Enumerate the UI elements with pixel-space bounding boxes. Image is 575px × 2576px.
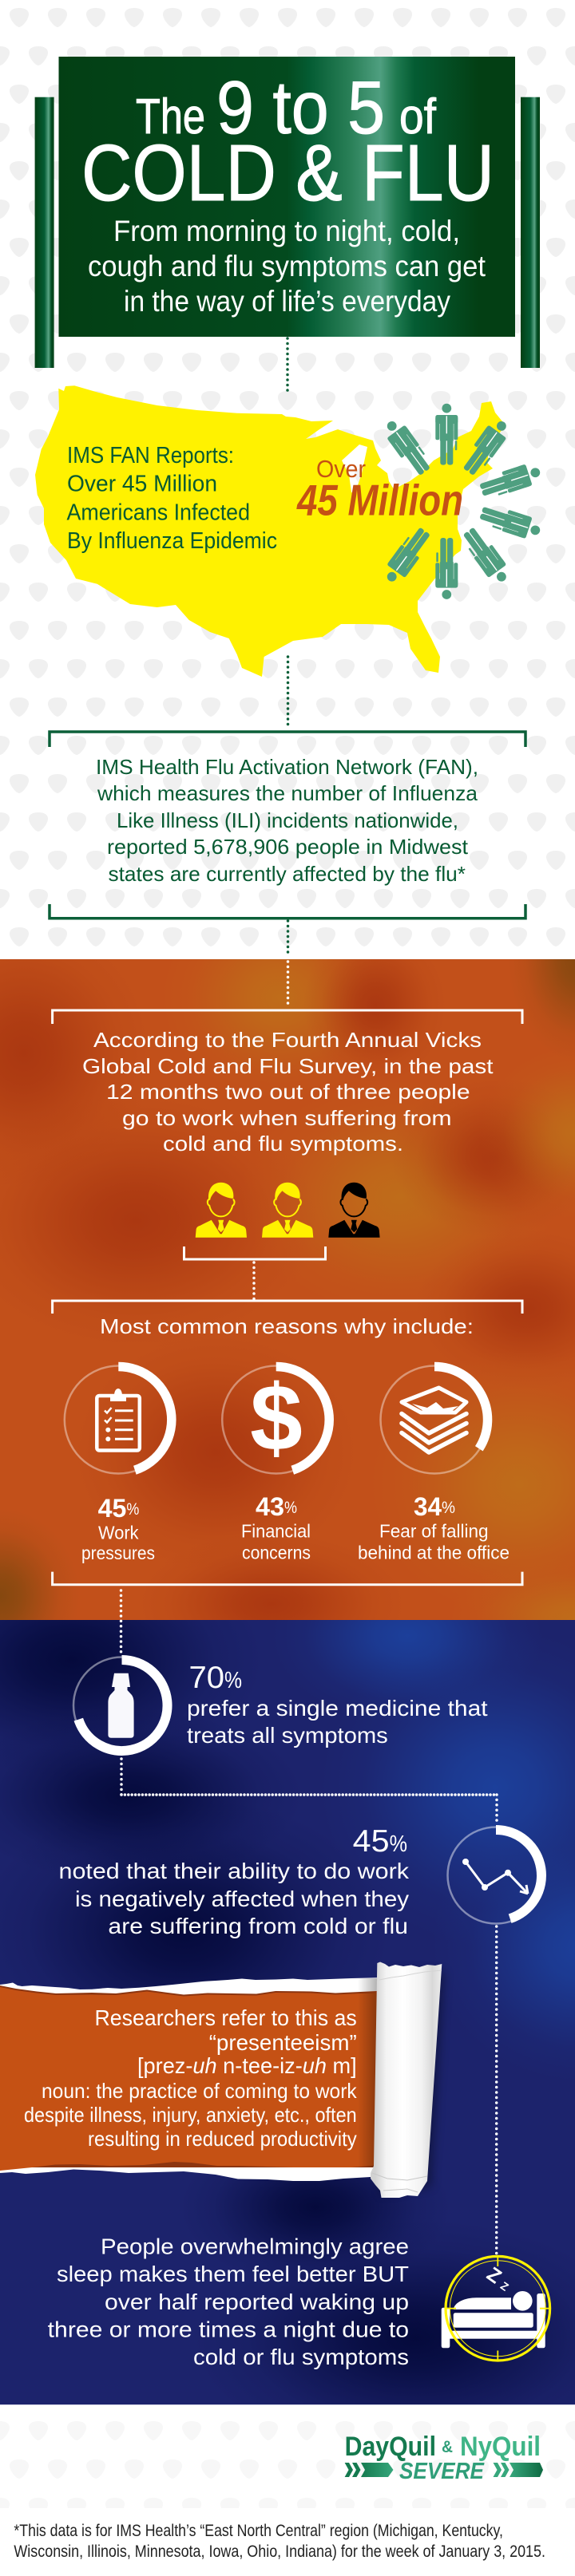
donut 43% bbox=[222, 1366, 330, 1473]
panel: footer bbox=[0, 2421, 575, 2561]
stat 45% bbox=[98, 1494, 139, 1523]
title: COLD & FLU bbox=[81, 128, 494, 218]
stat 34%: % bbox=[442, 1499, 455, 1517]
label: behind at the office bbox=[358, 1542, 510, 1563]
left banner post bbox=[35, 97, 54, 368]
dotted connector: banner to map bbox=[286, 338, 289, 394]
sleep paragraph: over half reported waking up bbox=[105, 2290, 409, 2314]
dotted connector: 45% to sleep bbox=[495, 1926, 498, 2254]
presenteeism definition: resulting in reduced productivity bbox=[88, 2127, 357, 2151]
stat: over 45 million bbox=[296, 455, 463, 525]
title: of bbox=[399, 89, 437, 144]
stat 45%: % bbox=[126, 1500, 139, 1519]
icon: medicine bottle bbox=[108, 1673, 134, 1738]
panel: header banner bbox=[35, 57, 540, 368]
stat 43% bbox=[256, 1492, 297, 1521]
logo: DayQuil and NyQuil Severe: SEVERE bbox=[399, 2459, 485, 2484]
title: The bbox=[136, 89, 205, 144]
presenteeism definition: [prez-uh n-tee-iz-uh m] bbox=[137, 2053, 357, 2078]
label: Work bbox=[98, 1523, 139, 1543]
shade on torn edge bbox=[358, 1978, 377, 1994]
right banner post bbox=[521, 97, 540, 368]
title: 9 to 5 bbox=[216, 65, 385, 149]
background pattern bbox=[0, 0, 575, 959]
donut 34% bbox=[380, 1366, 489, 1473]
survey paragraph: cold and flu symptoms. bbox=[163, 1132, 403, 1156]
footnote bbox=[14, 2522, 545, 2561]
survey paragraph: 12 months two out of three people bbox=[106, 1080, 470, 1104]
panel: survey statement bbox=[53, 1010, 522, 1299]
label bbox=[241, 1521, 311, 1563]
FAN paragraph: Like Illness (ILI) incidents nationwide, bbox=[117, 808, 458, 832]
bottom bracket bbox=[50, 904, 525, 919]
stat 43%: 43 bbox=[256, 1492, 284, 1521]
description: noted that their ability to do work bbox=[59, 1859, 410, 1883]
divider bbox=[0, 2404, 575, 2405]
label: Fear of falling bbox=[379, 1521, 489, 1542]
presenteeism definition: despite illness, injury, anxiety, etc., often bbox=[24, 2103, 357, 2127]
orange panel bbox=[0, 1987, 377, 2171]
presenteeism definition bbox=[24, 2005, 358, 2151]
reason: work pressures bbox=[65, 1366, 172, 1563]
logo: DayQuil and NyQuil Severe: DayQuil bbox=[345, 2432, 436, 2462]
sleep paragraph: three or more times a night due to bbox=[48, 2317, 409, 2341]
panel: torn paper presenteeism bbox=[0, 1962, 444, 2198]
bracket bbox=[53, 1010, 522, 1024]
description bbox=[187, 1696, 488, 1748]
dotted connector bbox=[252, 1262, 256, 1299]
stat 45%: 45 bbox=[353, 1824, 390, 1859]
heading: Most common reasons why include: bbox=[100, 1314, 474, 1338]
presenteeism definition: noun: the practice of coming to work bbox=[42, 2079, 358, 2103]
donut 45% bbox=[447, 1827, 545, 1923]
label: pressures bbox=[81, 1543, 155, 1563]
FAN paragraph: which measures the number of Influenza bbox=[97, 781, 478, 805]
dotted connector: map to FAN text bbox=[287, 657, 289, 729]
sleep paragraph: People overwhelmingly agree bbox=[101, 2234, 409, 2258]
map caption: IMS FAN Reports: bbox=[67, 443, 234, 468]
stat 43%: % bbox=[284, 1499, 297, 1517]
subtitle: in the way of life’s everyday bbox=[124, 285, 450, 318]
roll shadow bbox=[380, 1971, 444, 2195]
description: prefer a single medicine that bbox=[187, 1696, 488, 1721]
panel: US map bbox=[35, 385, 543, 677]
stat: over 45 million: 45 Million bbox=[296, 476, 463, 525]
panel: 70 percent bbox=[73, 1657, 488, 1754]
FAN paragraph: IMS Health Flu Activation Network (FAN), bbox=[96, 755, 478, 779]
presenteeism definition: “presenteeism” bbox=[209, 2030, 357, 2055]
shadow beside roll bbox=[358, 1993, 377, 2167]
faint footer pattern bbox=[0, 2421, 575, 2517]
icon: bed with sleeper: Z bbox=[498, 2279, 511, 2294]
icon: bed with sleeper bbox=[442, 2263, 545, 2348]
sleep paragraph bbox=[48, 2234, 409, 2369]
stat 45%: 45 bbox=[98, 1494, 126, 1523]
panel: IMS FAN text bbox=[50, 732, 525, 919]
top bracket bbox=[53, 1301, 522, 1314]
logo: DayQuil and NyQuil Severe bbox=[345, 2432, 543, 2484]
map caption: Over 45 Million bbox=[67, 472, 217, 497]
icon: dollar sign: $ bbox=[250, 1365, 303, 1471]
FAN paragraph: states are currently affected by the flu* bbox=[109, 862, 466, 886]
stat 70%: % bbox=[224, 1668, 242, 1693]
presenteeism definition: Researchers refer to this as bbox=[94, 2005, 357, 2030]
stat 45%: % bbox=[390, 1831, 407, 1857]
panel: orange section background bbox=[0, 854, 575, 1684]
sleep paragraph: cold or flu symptoms bbox=[193, 2345, 409, 2369]
stat 70%: 70 bbox=[188, 1661, 224, 1695]
dotted connector: into orange section (white part) bbox=[287, 962, 289, 1008]
description: are suffering from cold or flu bbox=[108, 1914, 408, 1938]
stat 70% bbox=[188, 1661, 242, 1695]
map caption bbox=[67, 443, 277, 554]
map caption: By Influenza Epidemic bbox=[67, 528, 277, 554]
torn edge dark lip bbox=[0, 1985, 377, 2167]
subtitle bbox=[88, 215, 486, 318]
icon: stack of paper bbox=[402, 1388, 466, 1452]
stat: over 45 million: Over bbox=[316, 455, 366, 483]
icons: two of three people bbox=[196, 1183, 380, 1238]
bottom bracket bbox=[53, 1572, 522, 1585]
reason: fear of falling behind bbox=[358, 1366, 510, 1563]
panel: blue section background bbox=[0, 1540, 575, 2458]
logo: DayQuil and NyQuil Severe: NyQuil bbox=[460, 2432, 541, 2462]
subtitle: cough and flu symptoms can get bbox=[88, 250, 486, 282]
label: concerns bbox=[242, 1542, 311, 1563]
panel: reasons bbox=[53, 1301, 522, 1585]
logo: DayQuil and NyQuil Severe: & bbox=[442, 2438, 453, 2456]
dotted connector: orange to 70% donut bbox=[120, 1590, 122, 1652]
bracket under people bbox=[184, 1247, 326, 1259]
torn white paper bbox=[0, 1977, 378, 2181]
reason: financial concerns bbox=[222, 1365, 330, 1563]
subtitle: From morning to night, cold, bbox=[113, 215, 460, 247]
label bbox=[358, 1521, 510, 1563]
FAN paragraph bbox=[96, 755, 478, 886]
description: is negatively affected when they bbox=[75, 1887, 409, 1911]
stat 34% bbox=[414, 1492, 455, 1521]
stat 34%: 34 bbox=[414, 1492, 442, 1521]
green banner bbox=[59, 57, 515, 337]
survey paragraph: go to work when suffering from bbox=[122, 1106, 452, 1130]
survey paragraph bbox=[82, 1028, 494, 1156]
map of the United States bbox=[35, 385, 506, 677]
panel: 45 percent bbox=[59, 1824, 545, 1938]
icon: bed with sleeper: Z bbox=[482, 2263, 506, 2288]
description: treats all symptoms bbox=[187, 1723, 388, 1748]
map caption: Americans Infected bbox=[67, 500, 250, 526]
donut 70% bbox=[73, 1657, 170, 1754]
yellow target ring bbox=[445, 2256, 551, 2361]
panel: sleep bbox=[48, 2234, 551, 2369]
paper roll bbox=[371, 1962, 442, 2198]
description bbox=[59, 1859, 410, 1938]
sleep paragraph: sleep makes them feel better BUT bbox=[57, 2262, 409, 2286]
stat 45% bbox=[353, 1824, 407, 1859]
ring of people icons bbox=[380, 404, 543, 599]
survey paragraph: According to the Fourth Annual Vicks bbox=[93, 1028, 482, 1052]
donut 45% bbox=[65, 1366, 172, 1473]
icon: declining line chart bbox=[462, 1859, 528, 1894]
label: Financial bbox=[241, 1521, 311, 1542]
FAN paragraph: reported 5,678,906 people in Midwest bbox=[107, 835, 469, 859]
icon: clipboard bbox=[97, 1389, 140, 1451]
dotted connector: into orange section (green part) bbox=[287, 921, 289, 957]
label bbox=[81, 1523, 155, 1563]
title bbox=[81, 65, 494, 218]
dotted connector: 70% to 45% bbox=[121, 1759, 497, 1824]
survey paragraph: Global Cold and Flu Survey, in the past bbox=[82, 1054, 494, 1078]
top bracket bbox=[50, 732, 525, 747]
